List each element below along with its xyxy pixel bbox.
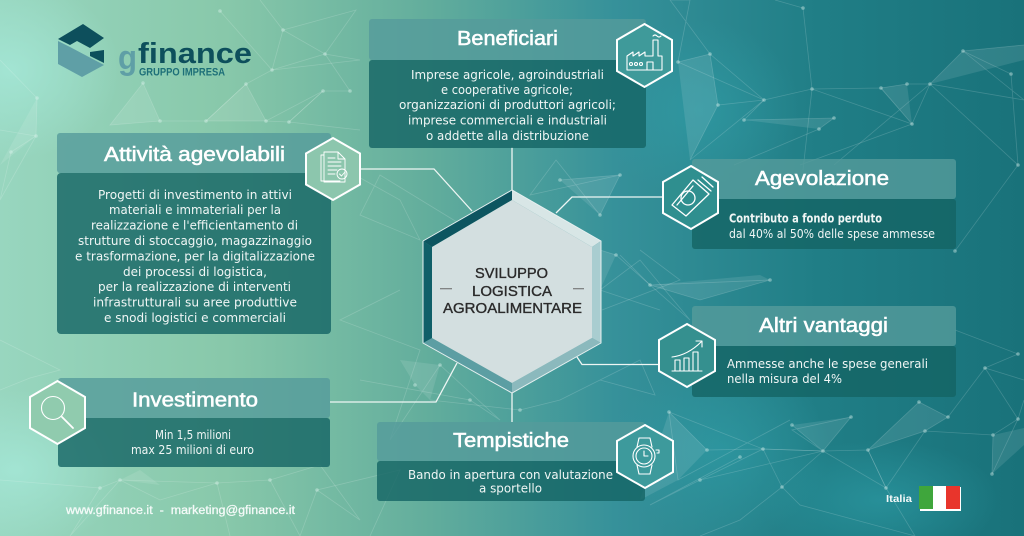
text: beneficiari: o addette alla distribuzione <box>426 128 589 143</box>
heading: Altri vantaggi: Altri vantaggi <box>759 315 888 337</box>
text: agevolazione: Contributo a fondo perduto <box>729 210 882 226</box>
text: tempistiche: a sportello <box>479 480 542 496</box>
heading: Agevolazione: Agevolazione <box>755 168 889 190</box>
text: investimento <box>131 427 254 457</box>
logo: gfinance: GRUPPO IMPRESA <box>139 66 225 78</box>
text: investimento: max 25 milioni di euro <box>131 442 254 457</box>
text: beneficiari: organizzazioni di produttori agricoli; <box>399 97 616 112</box>
icon: magnifying glass <box>30 381 85 444</box>
central title <box>443 266 582 317</box>
text: attività: strutture di stoccaggio, magazzinaggio <box>78 233 312 248</box>
text: attività: dei processi di logistica, <box>123 264 267 279</box>
text: beneficiari: imprese commerciali e industriali <box>408 112 607 128</box>
heading: Tempistiche: Tempistiche <box>453 430 569 452</box>
logo: gfinance: g <box>118 39 137 77</box>
text: attività: per la realizzazione di interventi <box>98 279 291 294</box>
icon: watch <box>617 425 673 488</box>
panel: Beneficiari <box>369 19 672 148</box>
panel: Tempistiche <box>377 422 673 501</box>
logo: gfinance: finance <box>138 38 252 70</box>
panel: Agevolazione <box>663 159 956 249</box>
icon: growth chart <box>659 324 715 387</box>
heading: Investimento: Investimento <box>132 390 258 412</box>
panel: Altri vantaggi <box>659 306 956 397</box>
icon: Italian flag <box>919 486 961 511</box>
panel: Attività agevolabili <box>57 133 360 334</box>
text: attività: e trasformazione, per la digitalizzazione <box>75 248 315 264</box>
text: beneficiari: e cooperative agricole; <box>441 82 573 97</box>
text: attività: e snodi logistici e commerciali <box>104 310 286 325</box>
text: attività: materiali e immateriali per la <box>109 202 281 217</box>
central title: SVILUPPO <box>475 266 548 282</box>
text: altri vantaggi <box>727 356 928 386</box>
label: Italia: Italia <box>886 493 912 505</box>
text: tempistiche <box>408 467 613 496</box>
text: attività: Progetti di investimento in attivi <box>98 187 292 202</box>
icon: factory <box>617 24 672 87</box>
footer: contacts: www.gfinance.it - marketing@gfinance.it <box>65 505 296 517</box>
central title: AGROALIMENTARE <box>443 301 582 317</box>
text: agevolazione: dal 40% al 50% delle spese ammesse <box>729 226 935 241</box>
connector lines <box>330 147 663 422</box>
logo: gfinance <box>58 24 252 78</box>
text: beneficiari <box>399 67 616 143</box>
heading: Attività agevolabili: Attività agevolabili <box>104 144 285 166</box>
heading: Beneficiari: Beneficiari <box>457 28 558 50</box>
central hexagon: Sviluppo logistica agroalimentare <box>423 190 601 393</box>
central title: LOGISTICA <box>472 284 552 300</box>
text: attività: infrastrutturali su aree produttive <box>93 294 297 310</box>
text: altri vantaggi: Ammesse anche le spese generali <box>727 356 928 371</box>
icon: banknotes <box>663 166 718 229</box>
text: attività: realizzazione e l'efficientamento di <box>91 218 298 232</box>
icon: document <box>306 138 360 200</box>
text: agevolazione <box>729 210 935 241</box>
text: attività <box>75 187 315 325</box>
text: investimento: Min 1,5 milioni <box>155 427 231 442</box>
text: beneficiari: Imprese agricole, agroindustriali <box>411 67 604 82</box>
text: altri vantaggi: nella misura del 4% <box>727 371 842 386</box>
panel: Investimento <box>30 378 330 467</box>
text: tempistiche: Bando in apertura con valutazione <box>408 467 613 482</box>
